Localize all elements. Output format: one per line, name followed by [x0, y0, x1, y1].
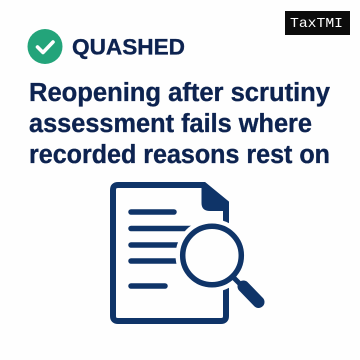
- status label: QUASHED: [72, 34, 185, 60]
- title: recorded reasons rest on: [29, 141, 330, 169]
- folded corner: [202, 183, 229, 211]
- title: Reopening after scrutiny: [29, 79, 331, 107]
- icon: green check badge: [28, 29, 62, 64]
- document text lines: [131, 212, 200, 286]
- TaxTMI watermark: [285, 11, 350, 35]
- TaxTMI watermark: TaxTMI: [290, 16, 343, 32]
- magnifying glass: [176, 219, 258, 302]
- icon: document with magnifying glass: [113, 183, 258, 321]
- title: assessment fails where: [29, 110, 312, 138]
- document outline: [113, 185, 226, 321]
- title: [29, 79, 331, 169]
